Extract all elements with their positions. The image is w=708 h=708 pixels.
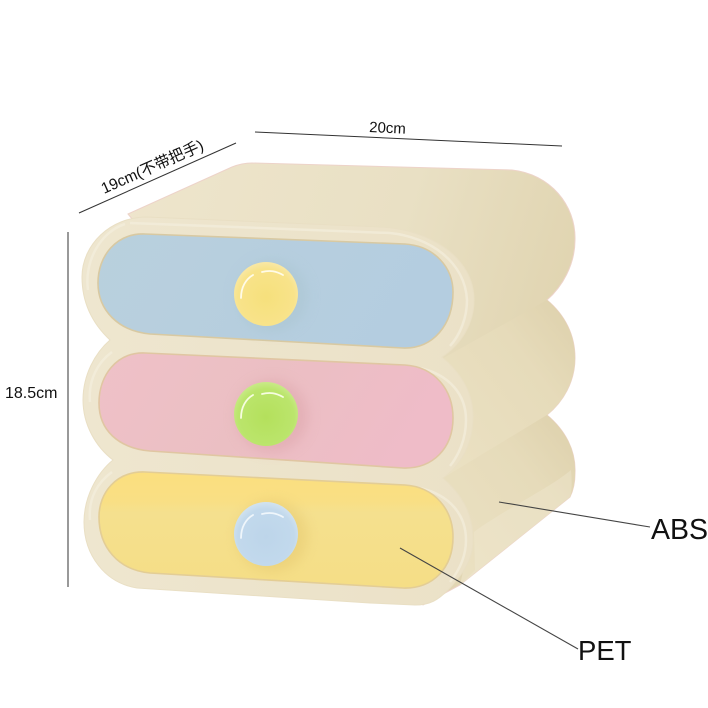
callout: ABS material bbox=[499, 502, 708, 546]
dimension: depth 19cm: 19cm(不带把手) bbox=[98, 136, 206, 198]
side lobe: bottom drawer bbox=[443, 415, 575, 585]
side lobe: middle drawer bbox=[440, 300, 575, 478]
drawer panel: pink bbox=[99, 353, 453, 468]
callout: PET material: PET bbox=[578, 635, 632, 666]
dimension: height 18.5cm: 18.5cm bbox=[5, 385, 57, 402]
front frame bbox=[82, 217, 474, 605]
knob: blue bbox=[234, 500, 308, 572]
dimension: depth 19cm bbox=[79, 136, 236, 213]
dimension: width 20cm bbox=[255, 119, 562, 146]
frame highlights bbox=[87, 223, 467, 582]
side highlight: bottom drawer bbox=[460, 470, 572, 585]
dimension: width 20cm: 20cm bbox=[369, 119, 406, 138]
product: stacked drawer organizer bbox=[82, 163, 575, 605]
drawer panel: yellow bbox=[99, 472, 453, 588]
knob: yellow bbox=[234, 260, 308, 332]
drawer panel: blue bbox=[98, 234, 453, 348]
callout: ABS material: ABS bbox=[651, 514, 708, 546]
knob: green bbox=[234, 380, 308, 452]
body side and top surfaces bbox=[128, 163, 575, 605]
callout: PET material bbox=[400, 548, 632, 666]
